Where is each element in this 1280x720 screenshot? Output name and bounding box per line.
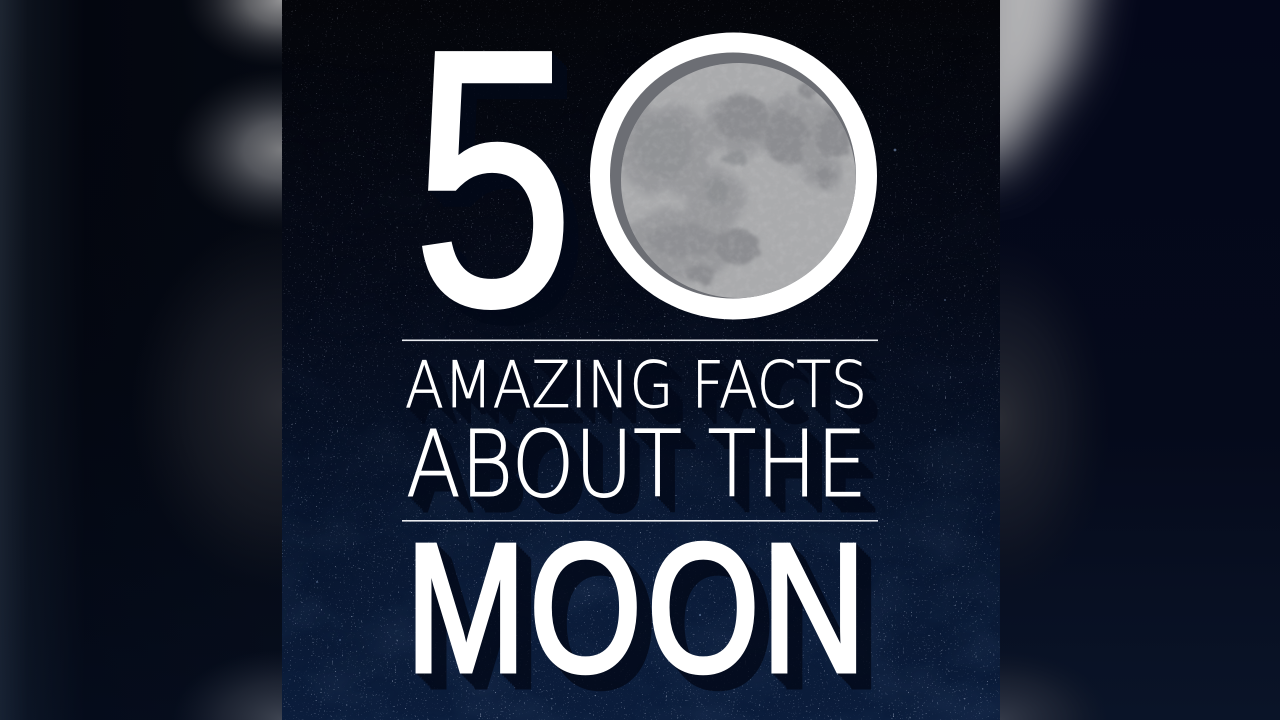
crescent shadow xyxy=(610,52,856,298)
heading: moon: MOON xyxy=(406,506,866,710)
moon surface xyxy=(615,58,860,303)
white ring xyxy=(590,32,877,320)
heading: amazing facts: AMAZING FACTS xyxy=(405,348,867,423)
panel: blurred left background xyxy=(0,0,282,720)
moon as the number 0 xyxy=(590,32,877,320)
heading: about the: ABOUT THE xyxy=(406,411,867,518)
panel: starry night sky poster xyxy=(282,0,1000,720)
divider: top rule xyxy=(402,340,878,341)
panel: blurred right background xyxy=(1000,0,1280,720)
divider: lower rule xyxy=(402,520,878,522)
